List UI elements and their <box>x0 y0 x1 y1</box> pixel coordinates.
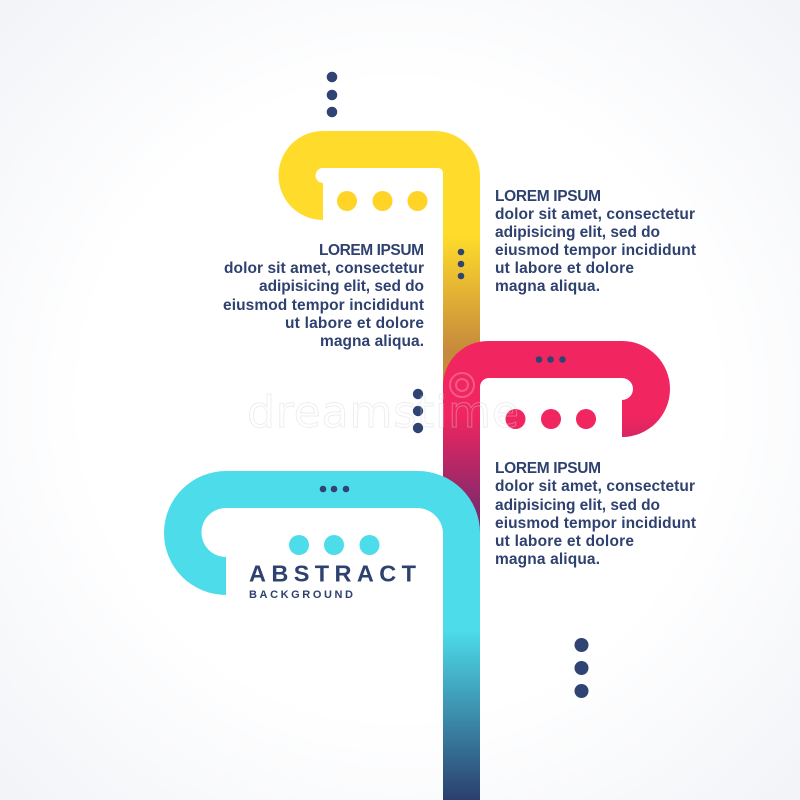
title: abstract background <box>249 560 417 601</box>
text block: upper right: LOREM IPSUM <box>495 188 601 205</box>
dots: on pink band <box>536 356 566 363</box>
text block: upper right: adipisicing elit, sed do <box>495 224 660 241</box>
text block: left: eiusmod tempor incididunt <box>223 297 424 314</box>
text block: left: ut labore et dolore <box>285 315 424 332</box>
title: abstract background: BACKGROUND <box>249 589 353 601</box>
text block: left: adipisicing elit, sed do <box>259 278 424 295</box>
dots: pink <box>506 409 596 429</box>
text block: left: dolor sit amet, consectetur <box>224 260 424 277</box>
text block: lower right: LOREM IPSUM <box>495 460 601 477</box>
dots: cyan <box>289 535 380 555</box>
text block: lower right: ut labore et dolore <box>495 533 634 550</box>
text block: upper right: magna aliqua. <box>495 278 600 295</box>
text block: lower right: eiusmod tempor incididunt <box>495 515 696 532</box>
dots: top navy <box>327 72 337 117</box>
text block: left: magna aliqua. <box>320 333 424 350</box>
dots: middle navy <box>413 389 423 433</box>
text block: left <box>223 242 424 350</box>
dots: yellow <box>337 191 428 211</box>
pink ribbon <box>443 341 670 540</box>
text block: lower right: adipisicing elit, sed do <box>495 497 660 514</box>
dots: on yellow stem <box>458 249 464 279</box>
text block: upper right: ut labore et dolore <box>495 260 634 277</box>
text block: upper right: dolor sit amet, consectetur <box>495 206 695 223</box>
yellow ribbon <box>278 131 480 400</box>
text block: upper right <box>495 188 696 295</box>
title: abstract background: ABSTRACT <box>249 560 417 586</box>
text block: upper right: eiusmod tempor incididunt <box>495 242 696 259</box>
text block: lower right <box>495 460 696 568</box>
dots: bottom navy <box>574 638 588 698</box>
dots: on cyan band <box>320 486 349 492</box>
text block: lower right: dolor sit amet, consectetur <box>495 478 695 495</box>
text block: lower right: magna aliqua. <box>495 551 600 568</box>
cyan ribbon <box>164 471 480 800</box>
text block: left: LOREM IPSUM <box>319 242 424 259</box>
watermark: dreamstime <box>247 387 519 438</box>
